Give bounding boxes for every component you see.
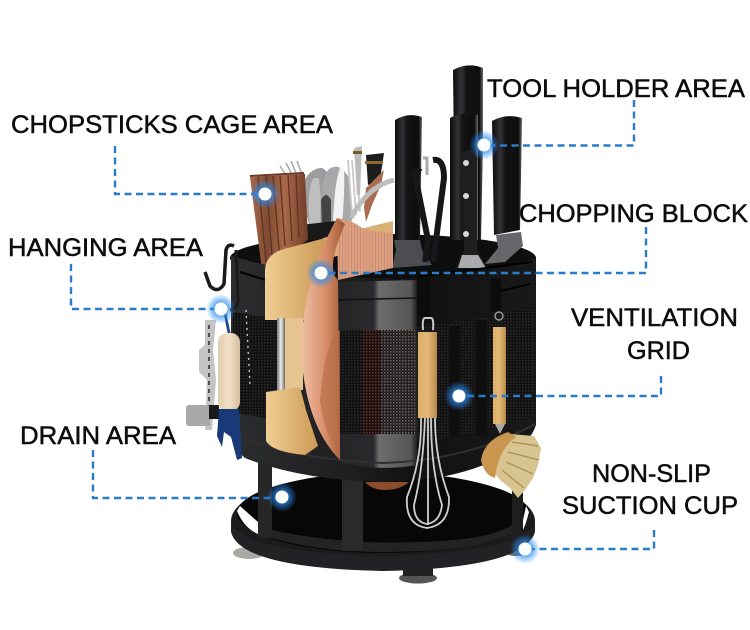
label: non-slip suction cup [562, 460, 738, 520]
cage interior rim [230, 234, 536, 282]
dot: ventilation [444, 381, 474, 411]
small dots on mesh [246, 310, 250, 385]
whisk [407, 318, 449, 528]
label: ventilation grid: GRID [627, 337, 690, 365]
dot: hanging [206, 294, 236, 324]
leader: drain area [93, 450, 280, 498]
leader: hanging area [71, 264, 218, 309]
knife handles [392, 65, 523, 268]
dot: suction cup [510, 534, 540, 564]
dot: tool holder [469, 130, 499, 160]
scissors [415, 158, 444, 262]
dot: chopsticks [250, 179, 280, 209]
dish brush [481, 312, 541, 498]
label: hanging area: HANGING AREA [8, 234, 203, 262]
callout lines [71, 100, 661, 549]
label: chopsticks cage area: CHOPSTICKS CAGE AREA [11, 111, 333, 139]
label: drain area: DRAIN AREA [20, 422, 176, 450]
label: non-slip suction cup: NON-SLIP [592, 460, 711, 488]
leader: chopsticks cage area [115, 146, 262, 194]
label: ventilation grid [571, 304, 738, 365]
product: rotating kitchen tool holder [186, 65, 541, 583]
leader: ventilation grid [462, 376, 661, 396]
rotating base tray [231, 460, 535, 571]
leader: tool holder area [488, 100, 634, 146]
barrel body with mesh [231, 256, 536, 490]
hooks [205, 245, 238, 310]
dot: drain [267, 482, 297, 512]
label: chopping block: CHOPPING BLOCK [519, 200, 748, 228]
round wooden chopping block [301, 218, 393, 460]
leader: chopping block [324, 227, 646, 273]
label: ventilation grid: VENTILATION [571, 304, 738, 332]
label: non-slip suction cup: SUCTION CUP [562, 492, 738, 520]
hanging tools left [186, 312, 242, 460]
label: tool holder area: TOOL HOLDER AREA [487, 75, 745, 103]
hotspot dots [206, 130, 540, 564]
back utensils [280, 146, 394, 240]
bamboo chopping board [265, 221, 393, 455]
leader: suction cup [528, 530, 654, 549]
chopsticks [250, 173, 308, 270]
dot: chopping block [306, 258, 336, 288]
suction feet [233, 546, 528, 584]
